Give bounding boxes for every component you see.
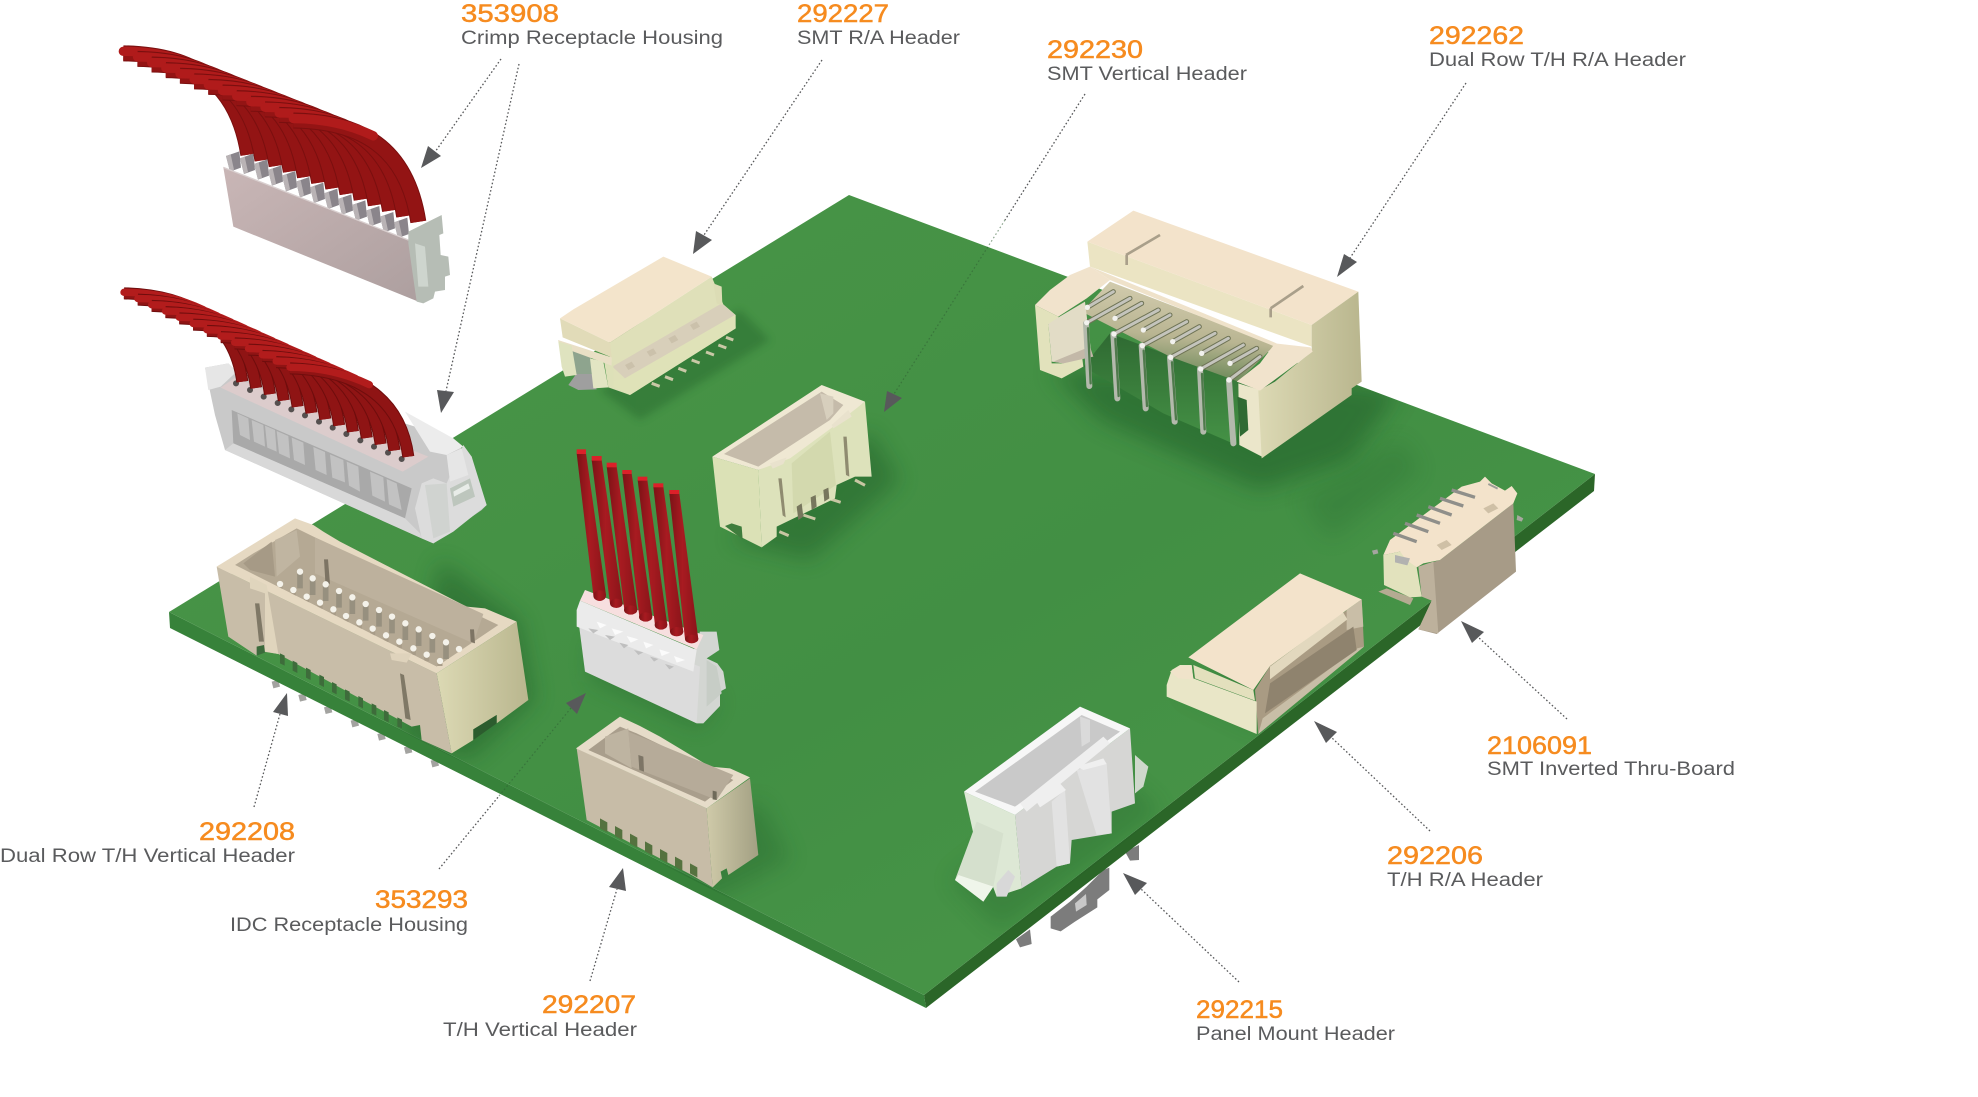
bottom slits	[280, 653, 402, 728]
solder tabs	[652, 337, 733, 386]
right face	[437, 622, 528, 753]
top surface	[1188, 573, 1362, 690]
connector: 292227 SMT R/A header	[558, 257, 736, 395]
opening	[1255, 599, 1364, 734]
bottom rail	[225, 443, 422, 538]
description: Crimp Receptacle Housing	[461, 28, 723, 49]
callout: 292207	[443, 868, 638, 1041]
description: T/H R/A Header	[1387, 870, 1544, 891]
description: SMT Vertical Header	[1047, 64, 1248, 85]
pcb board	[169, 195, 1595, 1008]
lower block	[1167, 665, 1257, 734]
part number: 292208	[199, 818, 295, 846]
callout: 353908 crimp receptacle housing	[421, 0, 723, 413]
callout: 2106091	[1461, 621, 1735, 780]
clips on rim	[770, 457, 787, 469]
connector: 292207 T/H vertical header	[576, 717, 758, 887]
callout: 353293	[230, 693, 586, 936]
rim	[964, 707, 1130, 815]
connector: 292208 dual row T/H vertical header	[217, 518, 528, 753]
rear wall	[1082, 282, 1275, 382]
callout: 292227	[693, 0, 961, 254]
red wires	[577, 453, 698, 643]
interior	[975, 715, 1120, 807]
description: SMT Inverted Thru-Board	[1487, 759, 1735, 780]
description: Dual Row T/H Vertical Header	[0, 846, 296, 867]
board left side face	[169, 612, 926, 1008]
connector shadows on board	[400, 310, 1420, 930]
right face	[707, 778, 758, 887]
part number: 292230	[1047, 36, 1143, 64]
wires	[123, 51, 418, 222]
callout: 292208	[0, 693, 296, 867]
leader to upper cable	[421, 59, 501, 168]
right face	[1015, 728, 1135, 888]
callout: 292262	[1337, 22, 1687, 277]
pin tips	[280, 572, 459, 661]
holes	[1437, 540, 1452, 550]
body	[205, 363, 487, 543]
board top surface	[169, 195, 1595, 995]
rear wall	[315, 537, 483, 643]
top surface	[560, 257, 712, 343]
leader	[590, 868, 626, 981]
left face	[964, 792, 1022, 897]
slots	[778, 478, 786, 517]
connector: 292206 T/H R/A header	[1167, 573, 1364, 734]
hole and metal foot	[568, 373, 597, 390]
part number: 2106091	[1487, 732, 1592, 760]
connector: 353908 crimp receptacle, cable on top	[123, 51, 450, 303]
pink top	[221, 378, 428, 472]
teeth band	[577, 601, 697, 672]
pins: panel mount legs	[1016, 845, 1139, 947]
description: Dual Row T/H R/A Header	[1429, 50, 1687, 71]
rear white band	[405, 412, 463, 455]
board right side face	[924, 474, 1595, 1008]
front small face	[1383, 552, 1422, 597]
description: IDC Receptacle Housing	[230, 915, 468, 936]
rim	[576, 717, 750, 808]
housing face	[223, 167, 418, 302]
upper front	[1193, 665, 1255, 701]
pin stems	[300, 572, 446, 659]
part number: 353293	[375, 886, 468, 914]
pocket	[235, 528, 498, 667]
pin holes	[236, 383, 402, 459]
lever	[955, 822, 1003, 902]
part number: 292215	[1196, 996, 1283, 1024]
housing front face	[578, 620, 700, 723]
connector: 2106091 SMT inverted thru-board	[1372, 477, 1523, 634]
clip	[997, 870, 1015, 897]
callout: 292215	[1123, 873, 1396, 1045]
connector: 353293 IDC receptacle with wires	[577, 449, 726, 723]
wire end caps	[577, 449, 679, 494]
body base	[610, 277, 736, 395]
leader	[693, 60, 822, 254]
front face	[217, 567, 452, 753]
housing top surface	[580, 590, 703, 649]
leader	[439, 693, 586, 869]
top block top surface	[1087, 211, 1358, 325]
latches	[250, 577, 278, 654]
block behind posts	[603, 357, 630, 395]
pins	[1393, 490, 1475, 542]
right end block	[415, 445, 487, 543]
solder foot	[1378, 588, 1413, 605]
part number: 292262	[1429, 22, 1524, 50]
top surface	[1383, 477, 1517, 567]
leader	[884, 94, 1085, 412]
interior	[588, 727, 733, 802]
front face	[577, 748, 713, 887]
left face	[712, 457, 762, 547]
left wing	[1035, 305, 1083, 378]
lower right face	[610, 315, 736, 395]
description: SMT R/A Header	[797, 28, 961, 49]
description: Panel Mount Header	[1196, 1024, 1396, 1045]
right end tab	[713, 283, 722, 305]
leader	[1123, 873, 1239, 982]
shadow under pins	[1083, 333, 1240, 445]
pins: dual row header tips	[272, 680, 439, 767]
housing end	[408, 215, 450, 303]
description: T/H Vertical Header	[443, 1020, 638, 1041]
leader	[1461, 621, 1567, 719]
housing right end	[692, 632, 726, 723]
slots	[255, 603, 264, 642]
right face	[758, 402, 872, 547]
leader	[1314, 721, 1430, 831]
leader	[254, 693, 288, 807]
slits on top	[1126, 235, 1303, 317]
bottom slits	[600, 818, 697, 877]
pins	[1086, 292, 1260, 443]
lower ledge	[612, 303, 735, 378]
rim	[217, 518, 517, 673]
leader to lower cable	[437, 64, 519, 413]
feet	[779, 480, 865, 536]
connector: 353908 crimp receptacle mated in housing	[124, 292, 487, 543]
right wing	[1238, 383, 1263, 457]
front window	[232, 410, 412, 518]
pcb underside pins	[272, 680, 1139, 947]
rim	[712, 385, 865, 470]
top block front	[1087, 242, 1312, 347]
callout: 292230	[884, 36, 1248, 412]
contact teeth	[226, 151, 409, 238]
part number: 292207	[542, 991, 636, 1019]
interior	[724, 392, 843, 467]
wires	[124, 292, 408, 457]
posts	[558, 342, 577, 377]
back tab	[1135, 755, 1148, 793]
connector: 292215 panel mount header	[955, 707, 1148, 902]
part number: 292227	[797, 0, 889, 28]
connector: 292262 dual row T/H R/A header	[1035, 211, 1362, 458]
window	[1395, 555, 1410, 565]
front upper face	[560, 318, 612, 357]
callout: 292206	[1314, 721, 1544, 891]
part number: 353908	[461, 0, 559, 28]
leader	[1337, 83, 1466, 277]
part number: 292206	[1387, 842, 1483, 870]
big side face	[1418, 503, 1516, 634]
connector: 292230 SMT vertical header	[712, 385, 872, 547]
